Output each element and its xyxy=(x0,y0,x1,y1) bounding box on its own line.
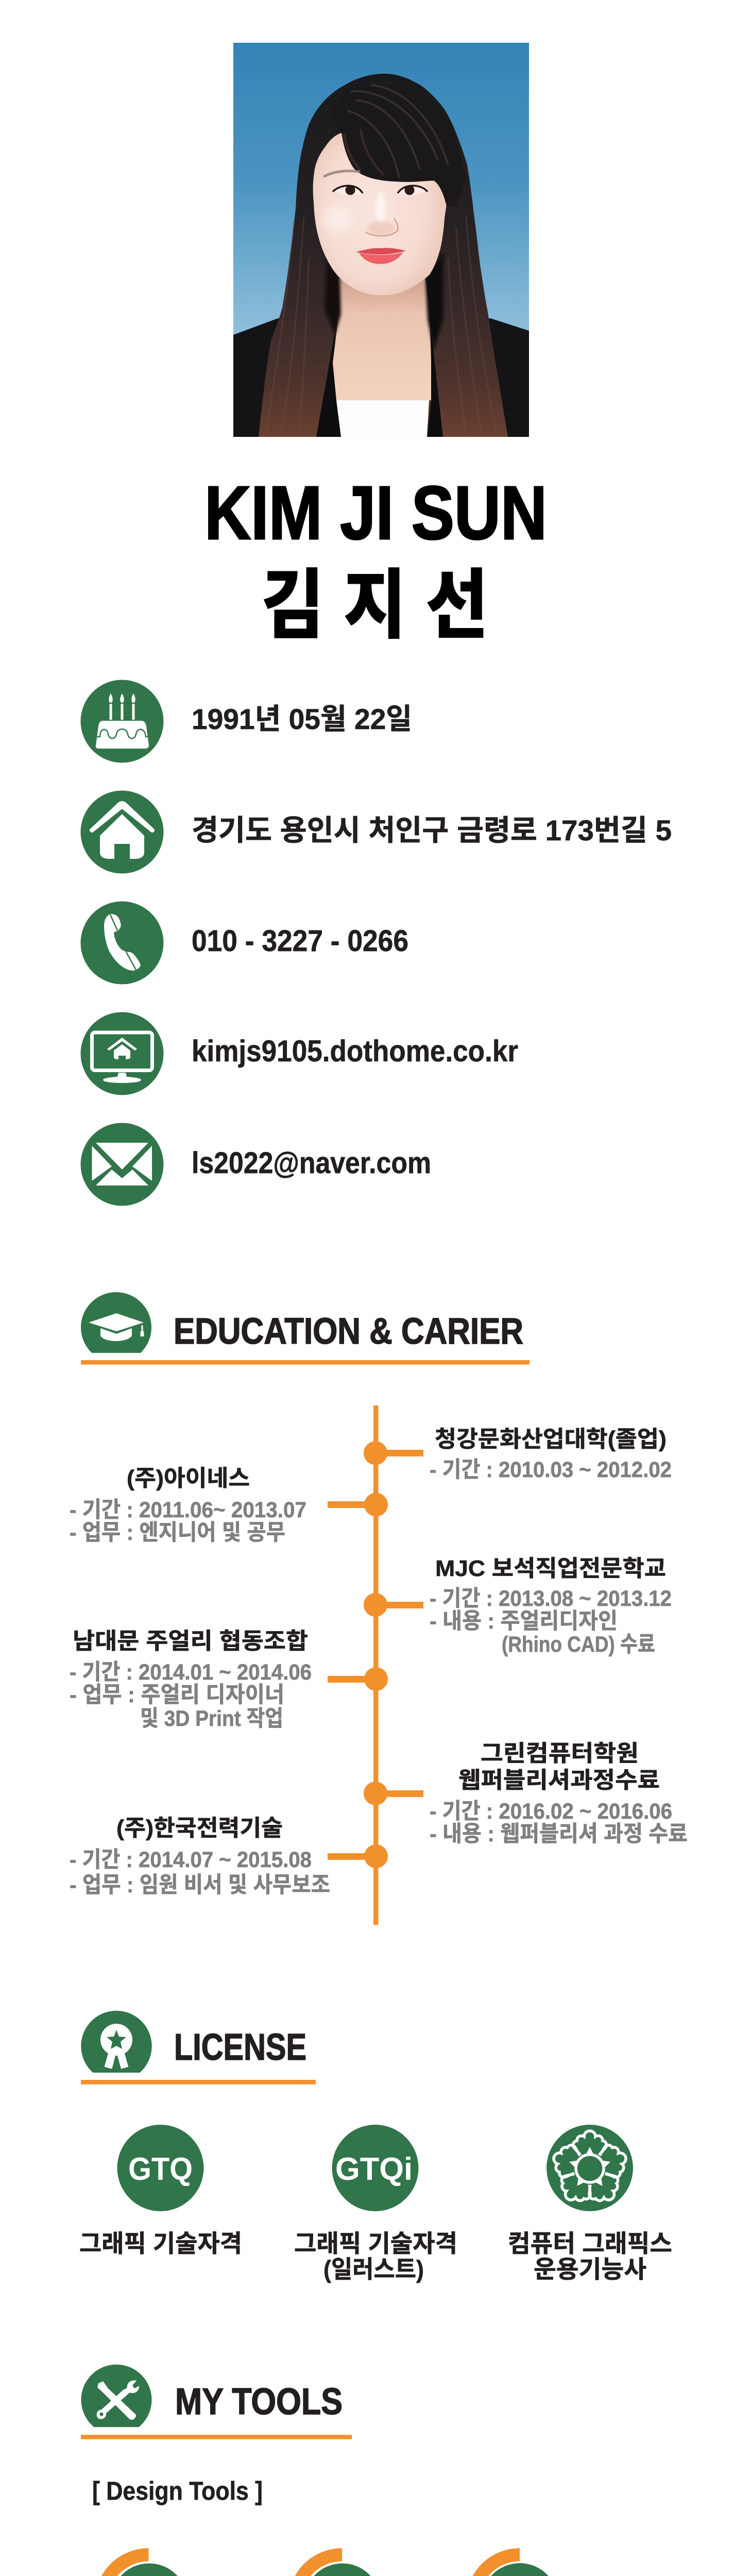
section heading: my tools xyxy=(81,2365,352,2439)
license label: 그래픽 기술자격 xyxy=(294,2230,457,2257)
icon: GTQi badge: GTQi xyxy=(335,2151,413,2187)
heading text: MY TOOLS xyxy=(175,2381,343,2422)
contact row: website xyxy=(80,1012,518,1095)
title: Korean name: 김 지 선 xyxy=(261,563,488,648)
icon: award ribbon xyxy=(81,2010,152,2073)
timeline entry: MJC: (Rhino CAD) 수료 xyxy=(502,1632,655,1657)
website text: kimjs9105.dothome.co.kr xyxy=(192,1035,518,1068)
timeline entry: Green Computer Academy: - 기간 : 2016.02 ~ 2016.06 xyxy=(430,1799,672,1824)
icon: GTQ badge xyxy=(117,2125,204,2211)
contact row: address xyxy=(80,790,672,874)
timeline entry: KEPCO E&C: - 업무 : 임원 비서 및 사무보조 xyxy=(70,1873,330,1897)
icon: Ai xyxy=(95,2548,202,2576)
icon: rhino head xyxy=(466,2548,558,2576)
contact row: birthday xyxy=(80,680,412,762)
timeline entry: Namdaemun xyxy=(70,1629,312,1731)
contact row: phone xyxy=(80,902,408,984)
license sublabel: 운용기능사 xyxy=(534,2256,646,2283)
heading underline xyxy=(81,1360,530,1364)
timeline entry: Namdaemun: - 기간 : 2014.01 ~ 2014.06 xyxy=(70,1660,312,1685)
address text: 경기도 용인시 처인구 금령로 173번길 5 xyxy=(192,814,672,846)
license label: 그래픽 기술자격 xyxy=(79,2230,242,2257)
subheading: design tools: [ Design Tools ] xyxy=(92,2477,263,2505)
section heading: license xyxy=(81,2011,316,2084)
icon: phone handset xyxy=(80,902,164,984)
icon: wrench and screwdriver xyxy=(81,2365,151,2427)
timeline entry: Cheonggang: 청강문화산업대학(졸업) xyxy=(435,1427,667,1452)
icon: GTQ badge: GTQ xyxy=(128,2151,193,2187)
license label: 컴퓨터 그래픽스 xyxy=(508,2230,672,2257)
timeline entry: Green Computer Academy: - 내용 : 웹퍼블리셔 과정 수료 xyxy=(430,1822,688,1846)
timeline entry: Cheonggang xyxy=(430,1427,672,1482)
timeline entry: Ines: - 업무 : 엔지니어 및 공무 xyxy=(70,1520,285,1545)
icon: monitor with house xyxy=(80,1012,164,1095)
icon: house xyxy=(80,790,164,874)
icon: national flower emblem xyxy=(547,2125,633,2211)
timeline entry: Namdaemun: 및 3D Print 작업 xyxy=(140,1706,283,1731)
license sublabel: (일러스트) xyxy=(323,2256,424,2283)
timeline entry: KEPCO E&C: - 기간 : 2014.07 ~ 2015.08 xyxy=(70,1848,312,1872)
license item: GTQi xyxy=(294,2125,457,2283)
timeline entry: KEPCO E&C xyxy=(70,1816,330,1897)
birthday text: 1991년 05월 22일 xyxy=(192,703,412,735)
timeline entry: MJC xyxy=(430,1556,672,1657)
icon: birthday cake xyxy=(80,680,164,762)
icon: envelope xyxy=(80,1123,164,1206)
photo: portrait of Kim Ji Sun xyxy=(233,43,529,437)
tool: Rhino 3D xyxy=(466,2548,571,2576)
timeline entry: Green Computer Academy: 그린컴퓨터학원 xyxy=(481,1741,639,1766)
icon: Ps xyxy=(288,2548,381,2576)
heading underline xyxy=(81,2435,352,2439)
tool: Adobe Photoshop xyxy=(279,2548,403,2576)
timeline entry: Cheonggang: - 기간 : 2010.03 ~ 2012.02 xyxy=(430,1458,672,1482)
license item: GTQ xyxy=(79,2125,242,2257)
timeline entry: MJC: MJC 보석직업전문학교 xyxy=(435,1556,666,1581)
heading text: LICENSE xyxy=(174,2027,306,2068)
timeline chart xyxy=(70,1405,688,1925)
timeline entry: KEPCO E&C: (주)한국전력기술 xyxy=(116,1816,283,1841)
license item: computer graphics xyxy=(508,2125,672,2283)
icon: GTQi badge xyxy=(332,2125,418,2211)
section heading: education and career xyxy=(81,1292,530,1364)
heading underline xyxy=(81,2080,316,2084)
timeline entry: Ines xyxy=(70,1466,306,1545)
phone text: 010 - 3227 - 0266 xyxy=(192,924,408,958)
timeline entry: Ines: - 기간 : 2011.06~ 2013.07 xyxy=(70,1498,306,1522)
timeline entry: Namdaemun: 남대문 주얼리 협동조합 xyxy=(73,1629,308,1654)
timeline entry: MJC: - 내용 : 주얼리디자인 xyxy=(430,1609,618,1634)
title: English name: KIM JI SUN xyxy=(204,471,547,555)
timeline entry: Namdaemun: - 업무 : 주얼리 디자이너 xyxy=(70,1683,284,1707)
timeline axis and markers xyxy=(328,1405,423,1925)
heading text: EDUCATION & CARIER xyxy=(174,1311,523,1352)
timeline entry: Ines: (주)아이네스 xyxy=(127,1466,250,1491)
timeline entry: Green Computer Academy xyxy=(430,1741,688,1846)
contact row: email xyxy=(80,1123,431,1206)
timeline entry: MJC: - 기간 : 2013.08 ~ 2013.12 xyxy=(430,1586,672,1611)
timeline entry: Green Computer Academy: 웹퍼블리셔과정수료 xyxy=(458,1768,660,1793)
email text: ls2022@naver.com xyxy=(192,1146,431,1180)
tool: Adobe Illustrator xyxy=(92,2548,205,2576)
icon: graduation cap xyxy=(81,1292,151,1353)
